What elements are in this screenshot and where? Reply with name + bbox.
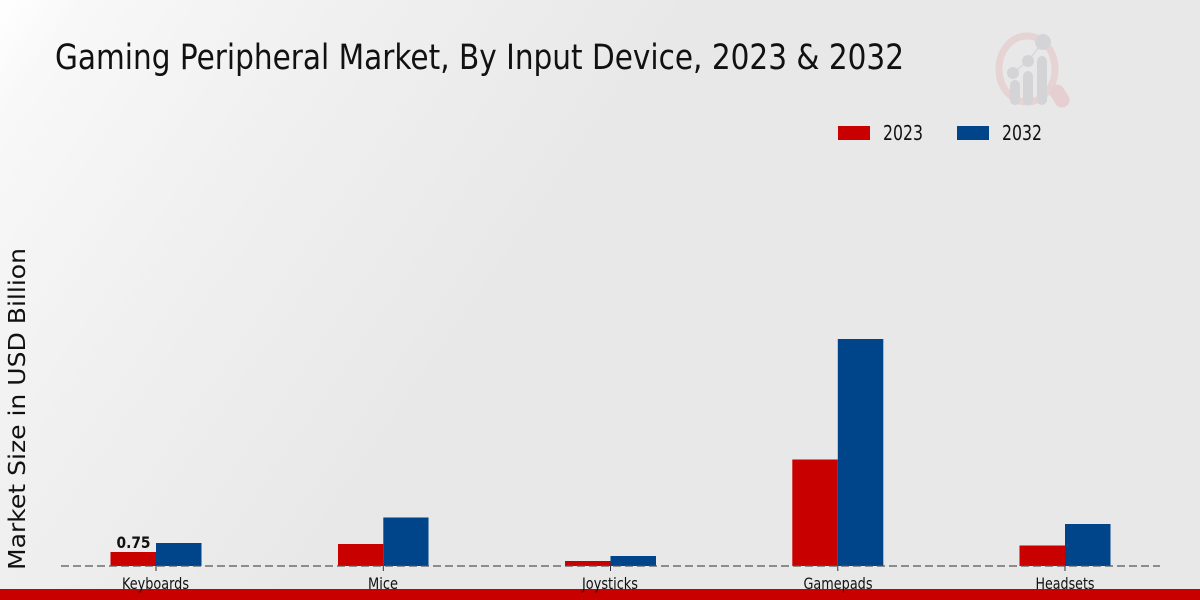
- bars: Gamepads: [792, 339, 883, 566]
- y axis label: Market Size in USD Billion: [5, 248, 31, 570]
- bars: Keyboards: [110, 543, 202, 566]
- legend item: 2023: [838, 121, 923, 145]
- x axis labels: Gamepads: [804, 574, 872, 593]
- bars: Headsets: [1020, 524, 1110, 566]
- x axis labels: Joysticks: [581, 574, 638, 593]
- x axis labels: [122, 574, 1094, 593]
- icon: watermark logo: [999, 34, 1062, 105]
- legend: [838, 121, 1042, 145]
- x axis labels: Keyboards: [122, 574, 189, 593]
- bars: Joysticks: [565, 556, 656, 566]
- legend item: 2032: [957, 121, 1042, 145]
- x axis labels: Headsets: [1036, 574, 1094, 593]
- bar chart: [61, 339, 1160, 571]
- data label: 0.75: 0.75: [116, 533, 150, 552]
- title: Gaming Peripheral Market, By Input Device, 2023 & 2032: [55, 38, 904, 78]
- x axis labels: Mice: [368, 574, 398, 593]
- legend item: 2032: 2032: [1002, 121, 1042, 145]
- footer bar: [0, 589, 1200, 600]
- bars: Mice: [338, 518, 428, 566]
- legend item: 2023: 2023: [883, 121, 923, 145]
- baseline dashed: [61, 565, 1160, 567]
